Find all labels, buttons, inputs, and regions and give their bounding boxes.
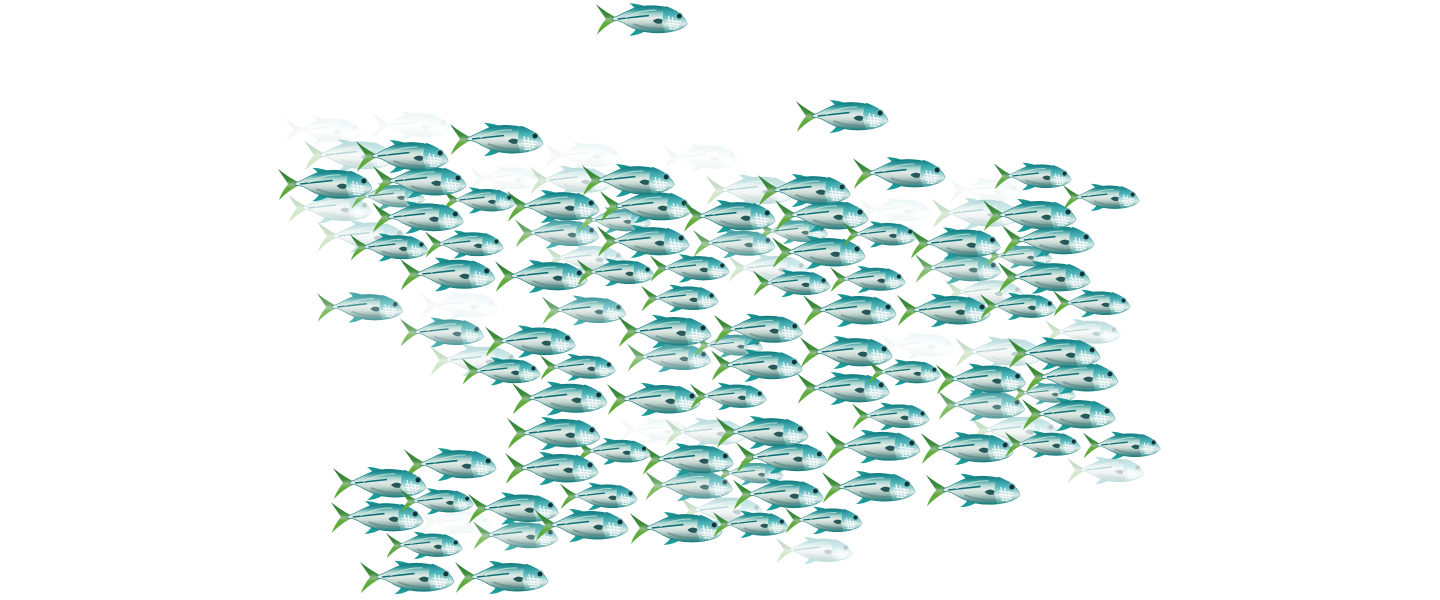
fish <box>1008 337 1100 370</box>
soft mid-tone fish layer <box>317 183 1075 550</box>
fish <box>980 293 1056 320</box>
ghost fish <box>470 166 541 191</box>
fish <box>758 174 850 207</box>
fish <box>582 164 674 197</box>
fish <box>462 358 540 385</box>
fish <box>803 294 896 327</box>
fish <box>505 452 598 485</box>
fish <box>386 532 462 559</box>
full-colour fish layer <box>278 3 1160 594</box>
fish <box>577 259 654 286</box>
fish <box>641 285 718 312</box>
fish <box>542 296 626 325</box>
fish <box>630 512 722 545</box>
fish <box>1002 224 1094 257</box>
fish <box>772 236 865 269</box>
fish <box>1012 382 1075 405</box>
pale fish <box>1067 457 1144 484</box>
fish <box>1053 290 1130 317</box>
fish <box>618 315 711 348</box>
fish <box>938 390 1024 421</box>
pale fish <box>932 198 1020 229</box>
ghost fish <box>372 112 450 139</box>
fish <box>515 219 599 248</box>
ghost fish <box>620 418 691 443</box>
fish <box>578 208 651 233</box>
fish <box>560 483 637 510</box>
fish <box>650 254 729 282</box>
fish <box>495 260 587 293</box>
ghost fish layer <box>285 112 1021 535</box>
fish <box>926 474 1020 507</box>
ghost fish <box>860 198 931 223</box>
fish <box>400 258 495 291</box>
fish <box>576 438 650 465</box>
fish <box>372 201 463 234</box>
fish <box>507 190 599 223</box>
fish <box>473 520 558 550</box>
pale fish <box>288 194 372 223</box>
fish <box>360 561 454 594</box>
fish <box>1022 398 1115 431</box>
fish <box>694 333 763 358</box>
fish <box>512 382 607 415</box>
fish <box>425 231 503 258</box>
fish <box>753 270 830 297</box>
fish <box>714 314 802 345</box>
fish <box>936 364 1025 395</box>
fish <box>373 165 466 198</box>
fish <box>736 441 827 474</box>
fish <box>400 488 473 514</box>
fish <box>775 199 868 232</box>
fish <box>1063 184 1139 211</box>
fish <box>757 219 828 244</box>
fish <box>317 292 403 323</box>
pale fish <box>706 175 795 206</box>
lone fish: upper right <box>796 100 888 133</box>
fish <box>915 253 1001 284</box>
fish <box>600 190 692 223</box>
fish <box>693 229 775 258</box>
ghost fish <box>545 142 621 169</box>
fish <box>645 470 732 501</box>
fish <box>331 501 423 534</box>
fish <box>822 471 915 504</box>
pale fish <box>680 496 764 525</box>
fish <box>897 294 990 327</box>
fish <box>535 509 628 542</box>
fish <box>683 200 775 233</box>
fish <box>998 261 1090 294</box>
fish <box>800 336 892 369</box>
fish <box>994 163 1071 190</box>
fish <box>507 417 600 450</box>
fish <box>826 430 920 463</box>
fish <box>716 461 783 485</box>
fish <box>910 227 1000 259</box>
fish <box>350 234 428 261</box>
pale fish <box>317 220 407 252</box>
fish <box>1083 432 1160 459</box>
fish <box>853 157 945 190</box>
fish <box>797 372 889 405</box>
ghost fish <box>880 332 954 359</box>
pale fish layer <box>288 139 1144 564</box>
fish <box>278 168 372 201</box>
fish <box>852 403 929 430</box>
fish <box>450 123 543 156</box>
lone fish: top <box>596 3 687 36</box>
fish <box>607 383 700 416</box>
fish <box>333 467 426 500</box>
fish <box>400 318 484 347</box>
fish <box>627 343 711 372</box>
fish <box>468 492 558 524</box>
pale fish <box>945 278 1024 306</box>
fish <box>442 187 515 213</box>
fish <box>785 507 862 534</box>
fish <box>830 266 905 293</box>
pale fish <box>665 418 747 447</box>
ghost fish <box>420 292 498 319</box>
fish <box>713 511 788 538</box>
fish <box>983 199 1076 232</box>
fish <box>356 140 448 173</box>
fish <box>642 443 733 476</box>
fish <box>921 432 1013 465</box>
ghost fish <box>950 178 1021 203</box>
fish <box>351 183 424 209</box>
pale fish <box>776 537 852 564</box>
fish <box>1005 431 1080 458</box>
fish <box>485 325 575 357</box>
pale fish <box>970 415 1058 446</box>
fish <box>868 360 941 385</box>
pale fish <box>304 139 395 172</box>
fish <box>455 561 548 594</box>
ghost fish <box>663 144 738 171</box>
fish <box>1025 361 1118 394</box>
fish <box>985 244 1052 268</box>
fish <box>597 225 689 258</box>
ghost fish <box>285 117 361 144</box>
fish <box>690 383 766 410</box>
fish <box>843 221 916 247</box>
pale fish <box>955 337 1044 368</box>
fish <box>716 416 808 449</box>
pale fish <box>530 166 612 195</box>
pale fish <box>1045 319 1120 346</box>
ghost fish <box>420 510 491 535</box>
fish <box>540 354 615 381</box>
fish <box>711 349 802 382</box>
pale fish <box>430 345 518 376</box>
fish <box>733 478 823 510</box>
pale fish <box>545 244 625 273</box>
fish <box>404 448 496 481</box>
pale fish <box>728 254 808 283</box>
